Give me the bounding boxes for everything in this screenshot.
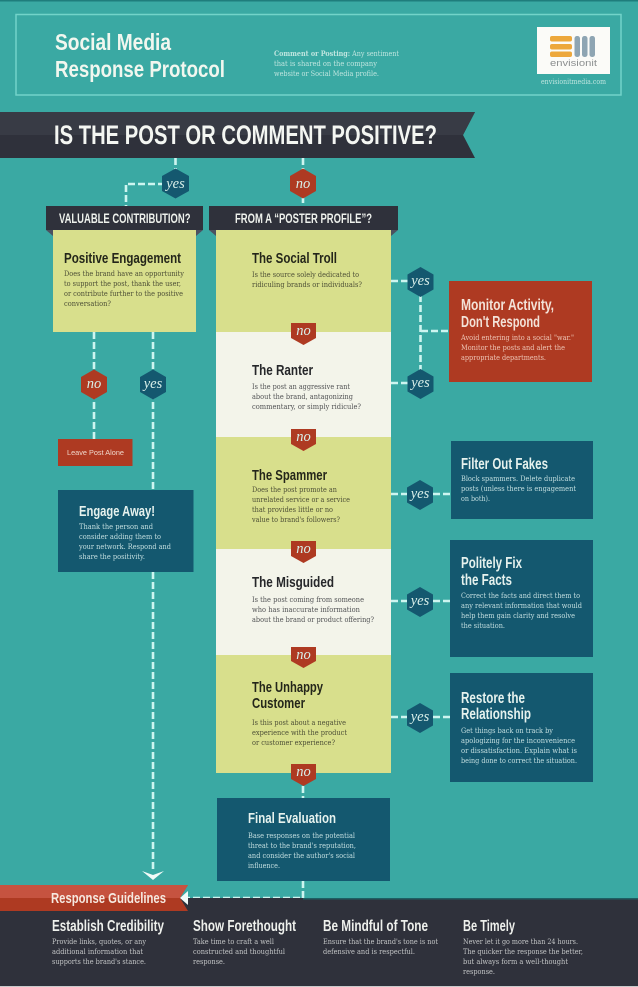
box: final evaluation: Final Evaluation — [248, 810, 336, 827]
box: filter out fakes: Block spammers. Delete duplicate — [461, 475, 575, 483]
panel: the unhappy customer: Customer — [252, 695, 305, 712]
arrow: down to guidelines — [142, 871, 164, 880]
box: engage away: your network. Respond and — [78, 543, 171, 551]
panel: the spammer — [216, 437, 391, 549]
panel: the social troll: The Social Troll — [252, 250, 337, 267]
panel: the ranter: about the brand, antagonizing — [252, 393, 353, 401]
yes hexagon: unhappy: yes — [409, 709, 430, 725]
no badge: misguided to unhappy: no — [296, 647, 311, 663]
guideline: establish credibility — [52, 918, 164, 966]
box: politely fix the facts: the Facts — [461, 572, 512, 589]
guideline: be mindful of tone — [323, 918, 438, 956]
panel: the misguided: The Misguided — [252, 574, 334, 591]
panel: response guidelines — [0, 885, 638, 987]
guideline: be mindful of tone: defensive and is respectful. — [323, 948, 415, 956]
panel: the spammer: The Spammer — [252, 467, 327, 484]
no badge: unhappy to final — [291, 764, 316, 786]
guideline: be timely: response. — [463, 968, 495, 976]
yes hexagon: spammer: yes — [409, 486, 430, 502]
box: restore the relationship: or dissatisfaction. Explain what is — [461, 747, 577, 755]
guideline: be timely: Be Timely — [463, 918, 515, 935]
box: restore the relationship — [450, 673, 593, 782]
guideline: be timely — [463, 918, 583, 976]
main question banner: IS THE POST OR COMMENT POSITIVE? — [54, 120, 437, 150]
panel: the misguided: about the brand or product offering? — [252, 616, 374, 624]
box: final evaluation: threat to the brand's reputation, — [248, 842, 356, 850]
box: restore the relationship: Relationship — [461, 706, 531, 723]
guidelines ribbon — [0, 885, 188, 911]
connector lines — [94, 158, 451, 898]
panel: the ranter: commentary, or simply ridicule? — [252, 403, 361, 411]
guideline: establish credibility: supports the brand's stance. — [52, 958, 146, 966]
header: valuable contribution — [46, 206, 203, 236]
header panel — [16, 14, 621, 95]
box: restore the relationship: apologizing for the inconvenience — [461, 737, 575, 745]
panel: positive engagement: or contribute further to the positive — [64, 290, 183, 298]
header: poster profile — [209, 206, 398, 236]
guideline: show forethought — [193, 918, 296, 966]
panel: positive engagement: conversation? — [64, 300, 111, 308]
box: final evaluation: Base responses on the potential — [248, 832, 356, 840]
guideline: show forethought: constructed and thoughtful — [193, 948, 286, 956]
logo — [537, 27, 610, 74]
title: Response Protocol — [55, 56, 225, 82]
panel: the spammer: Does the post promote an — [252, 486, 337, 494]
yes hexagon: spammer — [407, 480, 433, 510]
box: engage away: Engage Away! — [79, 503, 155, 520]
box: politely fix the facts: the situation. — [461, 622, 505, 630]
no badge: unhappy to final: no — [296, 764, 311, 780]
box: filter out fakes: posts (unless there is engagement — [461, 485, 576, 493]
panel: the spammer: that provides little or no — [252, 506, 333, 514]
no badge: spammer to misguided — [291, 541, 316, 563]
yes hexagon: ranter: yes — [409, 375, 430, 391]
guideline: be mindful of tone: Be Mindful of Tone — [323, 918, 428, 935]
box: restore the relationship: Restore the — [461, 690, 525, 707]
title — [55, 29, 225, 82]
panel: the social troll — [216, 230, 391, 332]
guideline: show forethought: Show Forethought — [193, 918, 296, 935]
yes hexagon: unhappy — [407, 703, 433, 733]
no badge: misguided to unhappy — [291, 647, 316, 668]
guideline: be timely: but always form a well-thought — [463, 958, 568, 966]
yes hexagon: misguided — [407, 587, 433, 617]
guideline: be mindful of tone: Ensure that the brand's tone is not — [323, 938, 438, 946]
yes hexagon: misguided: yes — [409, 593, 430, 609]
box: leave post alone — [58, 439, 132, 466]
guideline: establish credibility: additional information that — [52, 948, 143, 956]
panel: the social troll: Is the source solely dedicated to — [252, 271, 359, 279]
box: monitor activity: Monitor Activity, — [461, 297, 554, 314]
box: engage away: share the positivity. — [79, 553, 145, 561]
yes hexagon: left — [140, 370, 166, 400]
box: filter out fakes: Filter Out Fakes — [461, 456, 548, 473]
no badge: ranter to spammer — [291, 429, 316, 451]
panel: positive engagement: to support the post, thank the user, — [64, 280, 181, 288]
panel: the social troll: ridiculing brands or individuals? — [252, 281, 362, 289]
box: monitor activity — [449, 281, 592, 382]
panel: the spammer: value to brand's followers? — [251, 516, 340, 524]
panel: the misguided: who has inaccurate information — [252, 606, 360, 614]
yes hexagon: left: yes — [142, 376, 163, 392]
box: leave post alone: Leave Post Alone — [67, 448, 124, 457]
no hexagon: left — [81, 370, 107, 400]
box: politely fix the facts: any relevant information that would — [461, 602, 582, 610]
box: monitor activity: Monitor the posts and alert the — [461, 344, 565, 352]
logo: envisionit — [550, 58, 598, 68]
no badge: ranter to spammer: no — [296, 429, 311, 445]
box: monitor activity: Avoid entering into a social "war." — [460, 334, 574, 342]
panel: the spammer: unrelated service or a service — [252, 496, 350, 504]
guideline: show forethought: Take time to craft a well — [193, 938, 275, 946]
panel: the unhappy customer — [216, 655, 391, 773]
panel: positive engagement: Positive Engagement — [64, 250, 181, 267]
yes hexagon: troll: yes — [409, 273, 430, 289]
box: monitor activity: appropriate departments. — [461, 354, 546, 362]
box: final evaluation — [217, 798, 390, 881]
box: final evaluation: and consider the author's social — [248, 852, 356, 860]
box: final evaluation: influence. — [248, 862, 280, 870]
no badge: spammer to misguided: no — [296, 541, 311, 557]
box: politely fix the facts: help them gain clarity and resolve — [461, 612, 575, 620]
top no hexagon: no — [296, 176, 310, 192]
panel: the misguided: Is the post coming from someone — [252, 596, 364, 604]
definition text — [274, 49, 399, 78]
no hexagon: left: no — [87, 376, 101, 392]
box: filter out fakes — [451, 441, 593, 519]
panel: the ranter: Is the post an aggressive rant — [252, 383, 350, 391]
guideline: show forethought: response. — [193, 958, 225, 966]
no badge: troll to ranter — [291, 323, 316, 345]
arrow: left to guidelines — [180, 891, 188, 905]
no badge: troll to ranter: no — [296, 323, 311, 339]
box: monitor activity: Don't Respond — [461, 314, 540, 331]
box: restore the relationship: being done to correct the situation. — [461, 757, 577, 765]
box: engage away: Thank the person and — [79, 523, 153, 531]
yes hexagon: ranter — [408, 369, 434, 399]
panel: positive engagement: Does the brand have an opportunity — [64, 270, 184, 278]
guideline: establish credibility: Establish Credibility — [52, 918, 164, 935]
definition text: website or Social Media profile. — [274, 70, 379, 78]
guideline: establish credibility: Provide links, quotes, or any — [52, 938, 146, 946]
guidelines ribbon: Response Guidelines — [51, 890, 166, 907]
top yes hexagon: yes — [164, 176, 185, 192]
box: politely fix the facts: Correct the facts and direct them to — [461, 592, 580, 600]
box: filter out fakes: on both). — [461, 495, 490, 503]
website url: envisionitmedia.com — [541, 78, 606, 86]
box: engage away — [58, 490, 194, 572]
header: poster profile: FROM A “POSTER PROFILE”? — [235, 211, 372, 226]
panel: the ranter — [216, 332, 391, 437]
panel: the ranter: The Ranter — [252, 362, 313, 379]
top yes hexagon — [162, 168, 189, 198]
panel: the misguided — [216, 549, 391, 655]
guideline: be timely: The quicker the response the better, — [463, 948, 583, 956]
header: valuable contribution: VALUABLE CONTRIBUTION? — [59, 211, 190, 226]
main question banner — [0, 112, 475, 158]
panel: the unhappy customer: experience with the product — [252, 729, 347, 737]
panel: positive engagement — [53, 230, 196, 332]
box: politely fix the facts — [450, 540, 593, 657]
box: engage away: consider adding them to — [79, 533, 161, 541]
guideline: be timely: Never let it go more than 24 hours. — [463, 938, 578, 946]
panel: the unhappy customer: The Unhappy — [252, 679, 323, 696]
definition text: that is shared on the company — [274, 60, 377, 68]
title: Social Media — [55, 29, 171, 55]
panel: the unhappy customer: Is this post about a negative — [252, 719, 346, 727]
top no hexagon — [290, 168, 316, 198]
yes hexagon: troll — [408, 267, 434, 297]
panel: the unhappy customer: or customer experience? — [252, 739, 335, 747]
box: restore the relationship: Get things back on track by — [461, 727, 553, 735]
definition text: Comment or Posting: Any sentiment — [274, 49, 399, 58]
box: politely fix the facts: Politely Fix — [461, 555, 522, 572]
